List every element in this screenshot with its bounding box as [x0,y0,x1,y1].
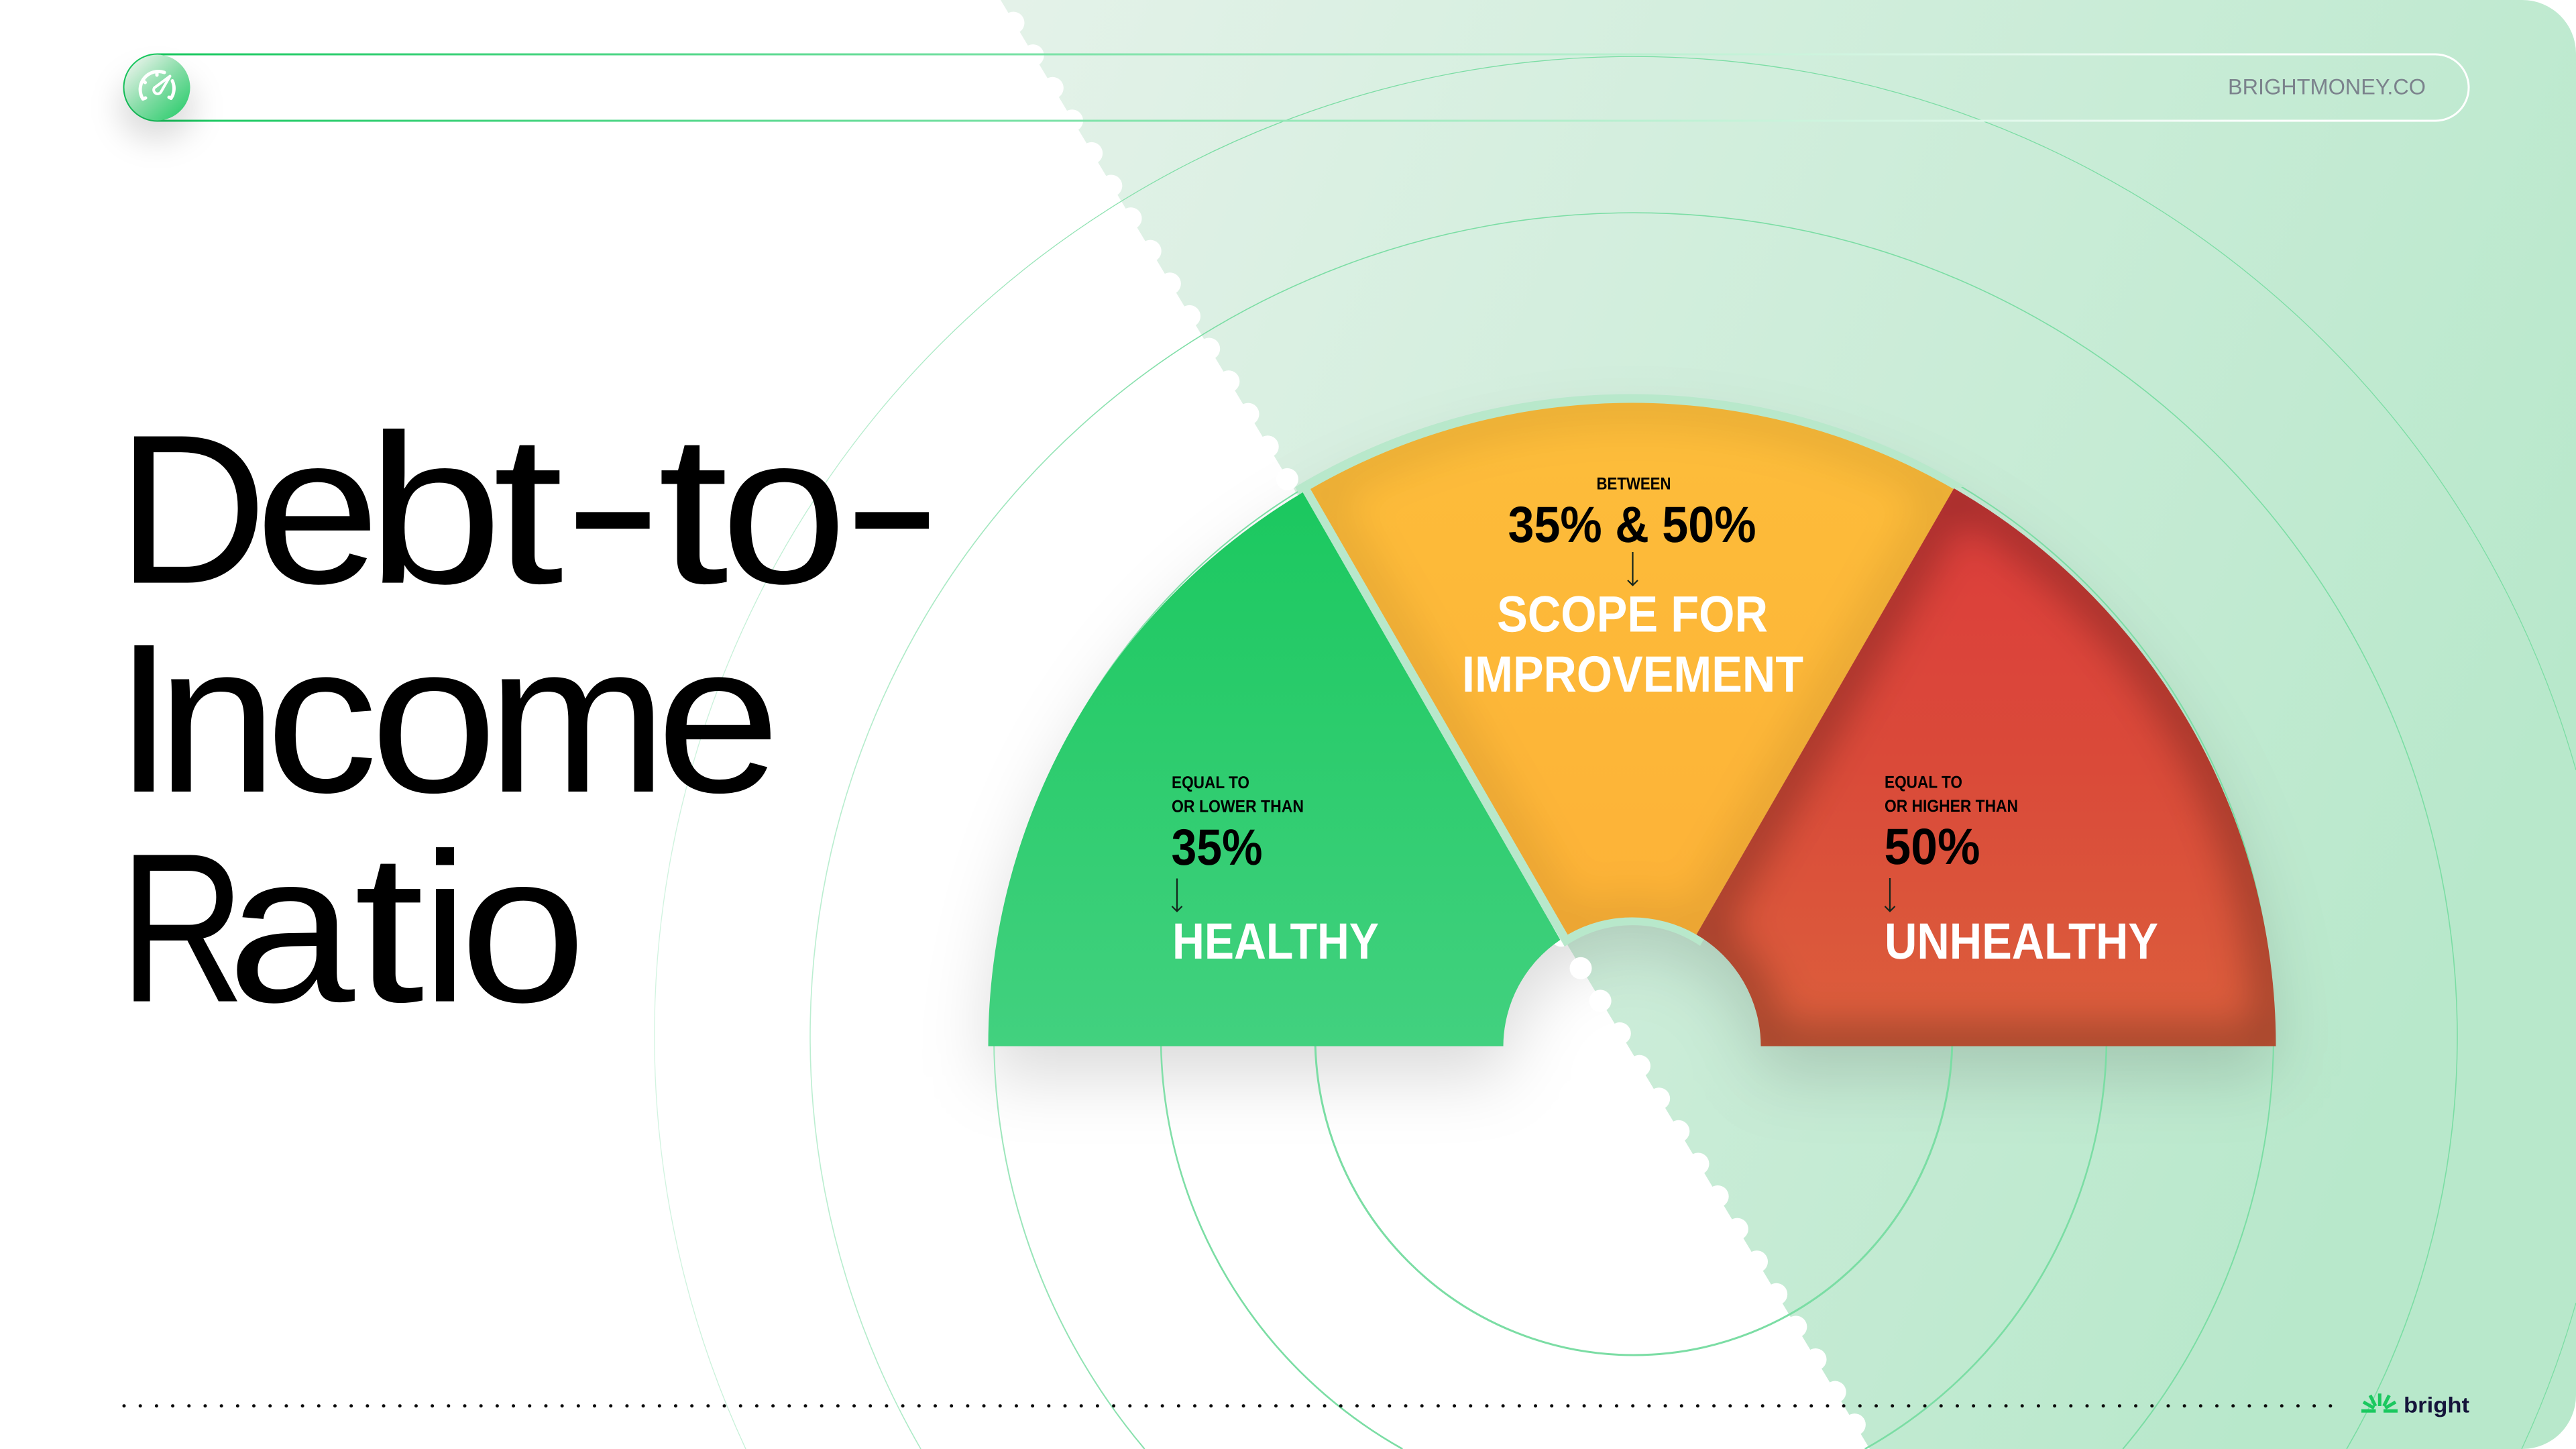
header icon shadow [118,74,196,141]
title: D [117,391,267,629]
header pill outline [124,54,2469,121]
unhealthy label block: UNHEALTHY [1885,913,2158,970]
scope for improvement label block: IMPROVEMENT [1462,646,1803,703]
logo wordmark: bright [2404,1393,2469,1417]
title: i [423,810,468,1047]
arrow: to unhealthy [1885,878,1895,911]
gauge drop shadow [989,433,2276,1076]
arrow: to healthy [1172,879,1182,911]
title: o [720,391,847,629]
gauge light border band [1295,394,1965,947]
scalloped white edge [1013,23,1868,1448]
title: e [656,600,781,837]
title: m [488,600,667,837]
title: n [157,600,278,837]
footer dotted line [124,1404,2347,1407]
website label: BRIGHTMONEY.CO [2228,74,2426,99]
title: c [266,600,378,837]
title: o [460,810,586,1047]
healthy label block: EQUAL TO [1172,773,1249,792]
title: I [115,600,172,837]
title: t [658,391,730,629]
title: - [842,385,942,623]
healthy label block: 35% [1171,819,1262,876]
healthy label block: OR LOWER THAN [1172,797,1304,816]
title: - [563,385,663,623]
healthy label block: HEALTHY [1172,913,1379,970]
scope for improvement label block: BETWEEN [1596,474,1671,493]
title: R [119,810,245,1047]
title: a [227,810,356,1047]
scope for improvement label block [1462,474,1803,703]
arrow: to scope for improvement [1628,552,1638,585]
logo sun mark [2361,1393,2398,1411]
unhealthy label block: 50% [1885,818,1980,875]
unhealthy label block [1885,773,2158,970]
concentric rings [655,56,2576,1449]
scope for improvement label block: SCOPE FOR [1497,586,1768,643]
segment: scope for improvement [1310,403,1954,934]
segment: healthy [988,492,1560,1046]
title: t [354,810,425,1047]
scope for improvement label block: 35% & 50% [1508,496,1756,553]
gauge [988,394,2276,1046]
segment: unhealthy [1697,488,2276,1046]
footer logo [2361,1393,2469,1417]
header icon: speedometer [125,55,190,121]
title: t [493,391,565,629]
unhealthy label block: EQUAL TO [1885,773,1962,792]
green diagonal background panel [1001,0,2576,1449]
healthy label block [1171,773,1379,970]
header bar [118,54,2469,141]
title: b [366,391,503,629]
title: e [255,391,380,629]
unhealthy label block: OR HIGHER THAN [1885,797,2018,816]
title: o [370,600,498,837]
